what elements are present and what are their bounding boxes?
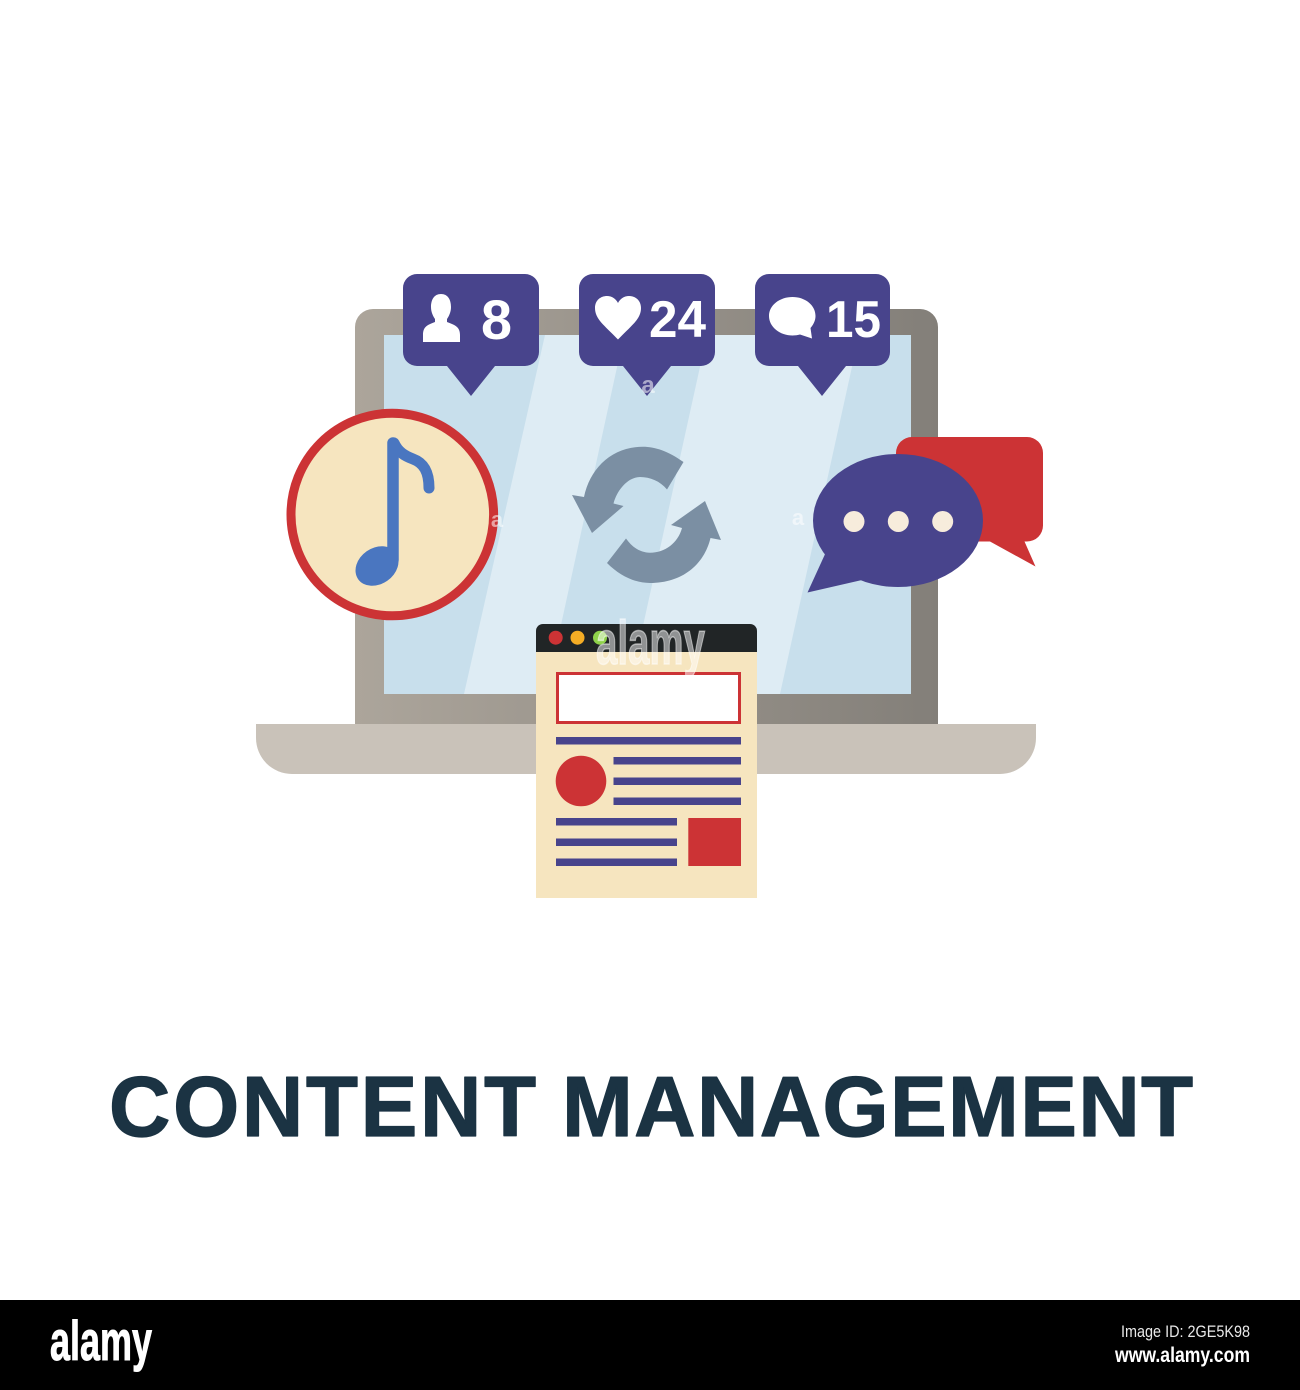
watermark [491, 372, 805, 678]
laptop [256, 309, 1036, 774]
notification: comments 15 [755, 274, 890, 396]
laptop base [256, 724, 1036, 774]
icon: music note in circle [291, 413, 494, 616]
icon: person [423, 294, 460, 342]
icon: comment [769, 297, 816, 338]
alamy logo: alamy [50, 1309, 152, 1372]
icon: sync arrows [572, 447, 721, 583]
blue speech bubble [808, 454, 983, 592]
icon: chat bubbles [808, 437, 1043, 592]
image id: Image ID: 2GE5K98 [1121, 1322, 1250, 1341]
red circle image [556, 756, 606, 806]
notification: followers 8 [403, 274, 539, 396]
watermark: a [491, 507, 504, 532]
notification: followers 8: 8 [481, 288, 512, 351]
title: MANAGEMENT [562, 1060, 1193, 1155]
title [109, 1060, 1193, 1155]
notification: likes 24 [579, 274, 715, 396]
red square image [688, 818, 741, 866]
header box [558, 674, 740, 722]
icon: heart [595, 296, 641, 340]
watermark: a [792, 505, 805, 530]
watermark: a [641, 372, 655, 399]
notification: comments 15: 15 [826, 291, 881, 349]
red speech bubble [896, 437, 1043, 566]
laptop lid [355, 309, 938, 724]
website: www.alamy.com [1114, 1344, 1250, 1367]
music note [348, 443, 429, 594]
notification: likes 24: 24 [649, 291, 706, 349]
title: CONTENT [109, 1060, 536, 1155]
watermark: alamy [596, 609, 705, 678]
text lines [556, 737, 741, 866]
footer bar [0, 1300, 1300, 1390]
browser window document [536, 624, 757, 898]
title bar [536, 624, 757, 652]
laptop screen [384, 335, 911, 694]
